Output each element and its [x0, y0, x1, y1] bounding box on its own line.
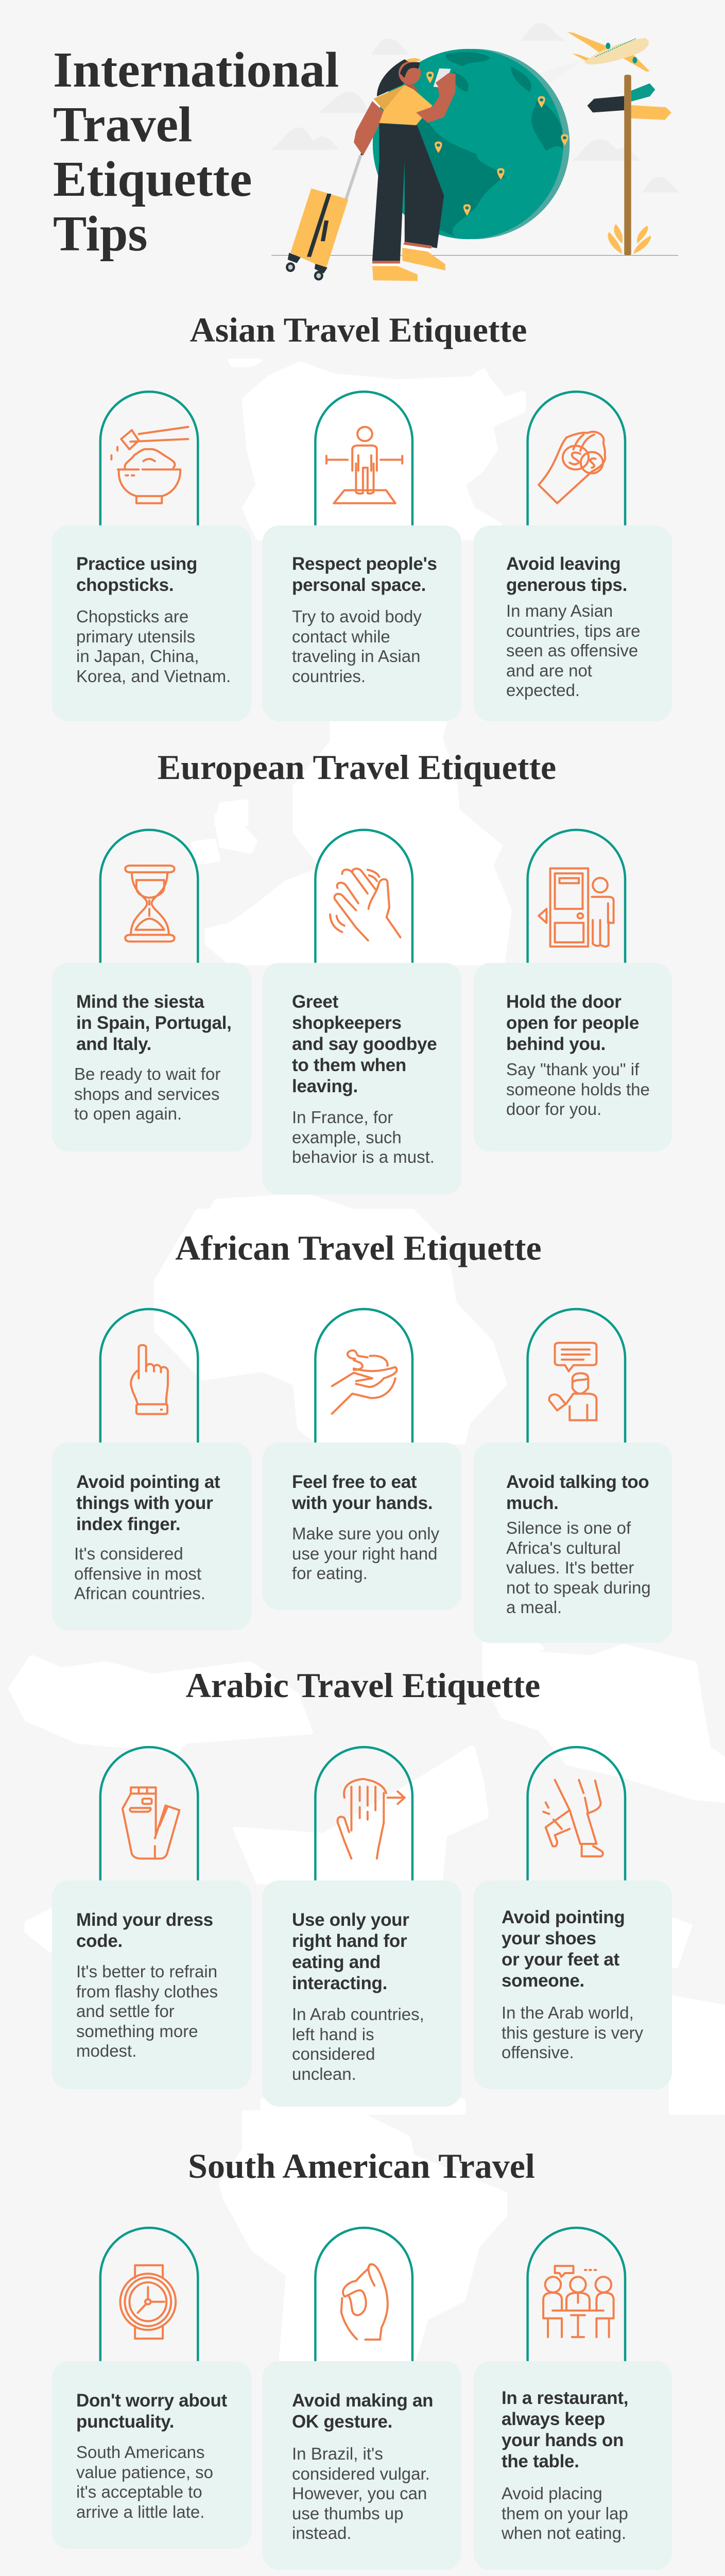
card text: In Brazil, it's	[292, 2444, 383, 2463]
card heading	[506, 554, 627, 595]
card heading: much.	[506, 1493, 559, 1513]
card text: Korea, and Vietnam.	[76, 667, 231, 686]
card: eat with hands	[263, 1443, 461, 1610]
card text	[74, 1544, 205, 1603]
card heading: OK gesture.	[292, 2412, 392, 2432]
title: Tips	[53, 206, 147, 262]
card text	[292, 1524, 439, 1583]
card text: them on your lap	[502, 2504, 628, 2523]
card text: this gesture is very	[502, 2023, 643, 2042]
card heading: Mind the siesta	[76, 992, 204, 1012]
card heading	[76, 554, 197, 595]
card heading: right hand for	[292, 1931, 407, 1951]
card text: door for you.	[506, 1099, 601, 1118]
card heading: chopsticks.	[76, 575, 174, 595]
card heading	[291, 1472, 433, 1513]
card heading: always keep	[502, 2409, 605, 2429]
title	[53, 42, 339, 262]
card text: contact while	[292, 627, 390, 646]
icon: ground line	[271, 255, 678, 256]
heading: European: European Travel Etiquette	[158, 748, 556, 787]
card text	[76, 1962, 218, 2060]
card: hands on the table	[474, 2361, 672, 2570]
card text: seen as offensive	[506, 641, 638, 660]
card heading	[292, 554, 437, 595]
arch icon: watch	[99, 2227, 199, 2361]
card text: In France, for	[292, 1108, 393, 1127]
heading: African: African Travel Etiquette	[175, 1228, 542, 1267]
card heading: or your feet at	[502, 1950, 619, 1970]
heading: Asian: Asian Travel Etiquette	[190, 310, 527, 349]
arch icon: hand with chicken	[314, 1308, 414, 1443]
card text: unclean.	[292, 2064, 356, 2083]
arch icon: chopsticks	[99, 391, 199, 526]
card: shoes	[474, 1880, 672, 2089]
card heading: in Spain, Portugal,	[76, 1013, 232, 1033]
card: door	[474, 963, 672, 1151]
card heading: Practice using	[76, 554, 197, 574]
arch icon: pointing finger	[99, 1308, 199, 1443]
card heading: index finger.	[76, 1514, 180, 1534]
heading: South American: South American Travel	[188, 2146, 535, 2185]
card heading	[506, 992, 639, 1054]
card heading: code.	[76, 1931, 123, 1951]
arch icon: door	[526, 828, 626, 963]
card heading: generous tips.	[506, 575, 627, 595]
card text: South Americans	[76, 2443, 204, 2462]
card: siesta	[52, 963, 251, 1151]
card text: a meal.	[506, 1598, 562, 1617]
heading: Arabic: Arabic Travel Etiquette	[186, 1666, 540, 1705]
card heading: open for people	[506, 1013, 639, 1033]
card text: traveling in Asian	[292, 647, 420, 666]
card heading: Avoid making an	[292, 2391, 433, 2411]
card text: offensive in most	[74, 1564, 201, 1583]
card heading: Respect people's	[292, 554, 437, 574]
card: pointing	[52, 1443, 251, 1630]
card text: shops and services	[74, 1084, 219, 1104]
card: punctuality	[52, 2361, 251, 2549]
card heading: Avoid pointing	[502, 1907, 625, 1927]
icon: suitcase	[286, 145, 365, 281]
card heading: your hands on	[502, 2430, 624, 2450]
card text: offensive.	[502, 2043, 574, 2062]
card heading: behind you.	[506, 1034, 606, 1054]
card text: for eating.	[292, 1564, 368, 1583]
card text: Avoid placing	[502, 2484, 602, 2503]
card heading: shopkeepers	[292, 1013, 402, 1033]
card text: It's considered	[74, 1544, 183, 1563]
card heading: Avoid talking too	[506, 1472, 649, 1492]
card text: it's acceptable to	[76, 2482, 202, 2501]
card text	[502, 2484, 628, 2544]
card text: considered vulgar.	[292, 2464, 430, 2483]
card heading: Avoid pointing at	[76, 1472, 220, 1492]
card heading	[502, 1907, 625, 1991]
icon: signpost	[587, 75, 671, 256]
card: talking	[474, 1443, 672, 1643]
card text	[506, 601, 640, 700]
card text: to open again.	[74, 1104, 182, 1123]
card heading: the table.	[502, 2451, 579, 2471]
card text: value patience, so	[76, 2463, 213, 2482]
card heading: and Italy.	[76, 1034, 151, 1054]
card: dress code	[52, 1880, 251, 2089]
title: Travel	[53, 97, 192, 152]
card heading	[502, 2387, 628, 2472]
card heading: punctuality.	[76, 2412, 174, 2432]
card text: not to speak during	[506, 1578, 651, 1597]
card text: African countries.	[74, 1584, 205, 1603]
arch icon: people at table	[526, 2226, 628, 2361]
card text	[506, 1518, 651, 1617]
card text: someone holds the	[506, 1080, 650, 1099]
card text: However, you can	[292, 2484, 427, 2503]
hero illustration: traveller with globe	[271, 32, 679, 281]
card text: left hand is	[292, 2025, 374, 2044]
card heading	[76, 992, 232, 1054]
card text: In Arab countries,	[292, 2005, 424, 2024]
arch icon: OK gesture	[314, 2227, 414, 2361]
card text: expected.	[506, 681, 580, 700]
arch icon: speaking person	[526, 1308, 626, 1443]
card text: behavior is a must.	[292, 1147, 435, 1166]
card heading: Don't worry about	[76, 2391, 227, 2411]
card heading: to them when	[292, 1055, 406, 1075]
card: OK gesture	[263, 2361, 461, 2570]
card heading: and say goodbye	[292, 1034, 437, 1054]
card text: In many Asian	[506, 601, 613, 620]
arch icon: hand with coins	[526, 391, 626, 526]
card text	[292, 1108, 435, 1166]
card text	[292, 607, 422, 686]
card text: arrive a little late.	[76, 2502, 204, 2521]
card text: example, such	[292, 1128, 402, 1147]
card text	[292, 2444, 430, 2544]
card text	[74, 1064, 220, 1123]
arch icon: waving hands	[314, 828, 414, 963]
card text: from flashy clothes	[76, 1982, 218, 2001]
card text: Be ready to wait for	[74, 1064, 220, 1083]
arch icon: personal space	[314, 391, 414, 526]
title: Etiquette	[53, 151, 252, 207]
card text: Africa's cultural	[506, 1538, 621, 1557]
card text: It's better to refrain	[76, 1962, 217, 1981]
card text: values. It's better	[506, 1558, 634, 1577]
card heading	[292, 992, 437, 1096]
card text: In the Arab world,	[502, 2003, 634, 2022]
card heading	[76, 1910, 213, 1951]
icon: globe	[373, 49, 569, 239]
card heading: Mind your dress	[76, 1910, 213, 1930]
card text: something more	[76, 2022, 198, 2041]
arch icon: right hand with arrow	[314, 1745, 414, 1880]
card heading: Avoid leaving	[506, 554, 620, 574]
card text: primary utensils	[76, 627, 195, 646]
card text: Silence is one of	[506, 1518, 631, 1537]
card text: and settle for	[76, 2002, 175, 2021]
title: International	[53, 42, 339, 98]
card heading: Hold the door	[506, 992, 622, 1012]
card heading: Use only your	[292, 1910, 409, 1930]
card text: considered	[292, 2044, 375, 2063]
card heading: things with your	[76, 1493, 213, 1513]
card heading	[76, 2390, 227, 2432]
card text: Chopsticks are	[76, 607, 188, 626]
card text: countries, tips are	[506, 621, 640, 640]
card text: modest.	[76, 2041, 136, 2060]
card heading: Greet	[292, 992, 338, 1012]
card heading	[292, 1910, 409, 1993]
card text	[502, 2003, 643, 2062]
card text: instead.	[292, 2523, 352, 2543]
card text	[506, 1060, 650, 1118]
card heading: leaving.	[292, 1076, 358, 1096]
icon: airplane	[567, 32, 650, 72]
card text	[76, 607, 231, 686]
card text	[292, 2005, 424, 2083]
card text: use your right hand	[292, 1544, 438, 1563]
arch icon: clothes	[99, 1745, 199, 1880]
icon: background clouds	[269, 23, 680, 193]
card: shopkeepers	[263, 963, 461, 1195]
card heading: with your hands.	[292, 1493, 433, 1513]
card text	[76, 2443, 213, 2522]
card heading	[292, 2390, 433, 2432]
card heading: personal space.	[292, 575, 426, 595]
card heading: your shoes	[502, 1928, 596, 1948]
card heading: eating and	[292, 1952, 381, 1972]
card: tips	[474, 526, 672, 721]
arch icon: hourglass	[99, 828, 199, 963]
card heading	[506, 1472, 649, 1513]
card text: countries.	[292, 667, 366, 686]
card heading	[76, 1472, 220, 1534]
card text: and are not	[506, 661, 592, 680]
card text: Make sure you only	[292, 1524, 439, 1543]
icon: woman traveller	[354, 58, 456, 281]
card: chopsticks	[52, 526, 251, 721]
card text: when not eating.	[502, 2523, 626, 2543]
card heading: interacting.	[292, 1973, 387, 1993]
card heading: someone.	[502, 1971, 584, 1991]
card text: Say "thank you" if	[506, 1060, 639, 1079]
card text: in Japan, China,	[76, 647, 199, 666]
arch icon: pointing foot	[526, 1745, 626, 1880]
card heading: Feel free to eat	[292, 1472, 417, 1492]
card text: Try to avoid body	[292, 607, 422, 626]
card text: use thumbs up	[292, 2504, 403, 2523]
card: personal space	[263, 526, 461, 721]
card: right hand	[263, 1880, 461, 2107]
card heading: In a restaurant,	[502, 2388, 628, 2408]
